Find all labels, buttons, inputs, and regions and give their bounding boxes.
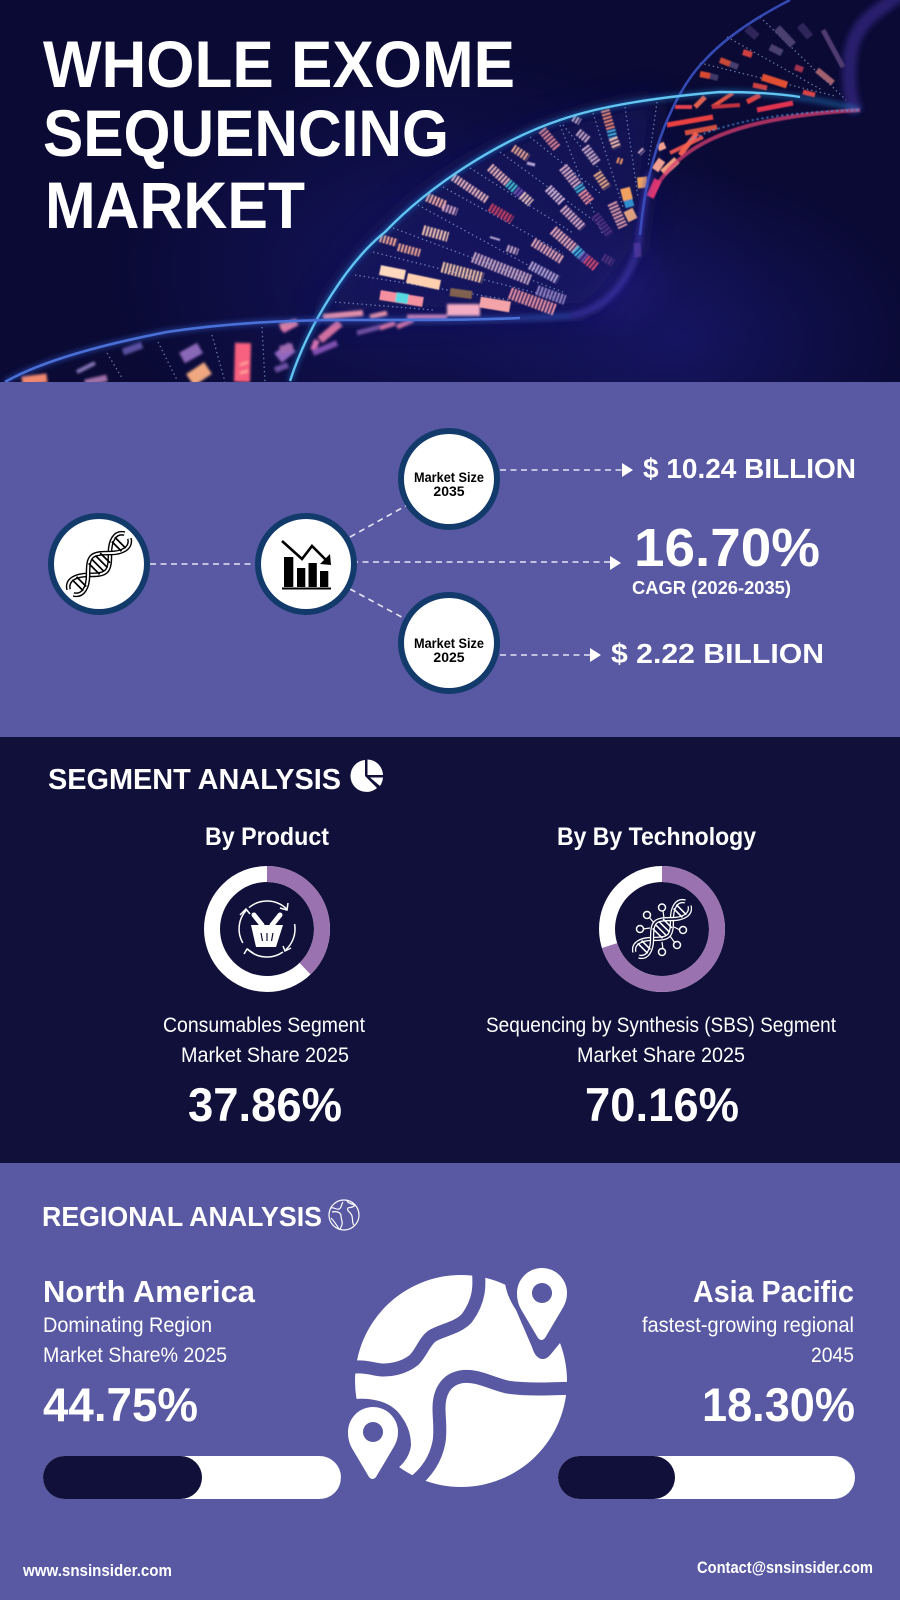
icon: DNA circle	[51, 516, 147, 612]
text: north america: North America	[43, 1274, 256, 1309]
callout: market size 2025: Market Size	[414, 635, 484, 651]
icon: basket	[239, 901, 295, 957]
title: WHOLE EXOME	[43, 27, 515, 101]
footer: website: www.snsinsider.com	[22, 1561, 172, 1580]
callout: market size 2025	[401, 595, 497, 691]
heading: segment analysis: SEGMENT ANALYSIS	[48, 764, 341, 796]
text: fastest-growing	[642, 1314, 854, 1367]
text: dominating region: Dominating Region	[43, 1314, 212, 1337]
title: MARKET	[45, 168, 305, 242]
value: consumables share: 37.86%	[188, 1079, 342, 1132]
bar: north america	[43, 1456, 341, 1499]
text: consumables segment: Consumables Segment	[163, 1014, 365, 1037]
callout: market size 2025: 2025	[433, 649, 465, 665]
strands	[5, 0, 860, 382]
icon: chart circle	[258, 516, 354, 612]
value: asia pacific share: 18.30%	[702, 1379, 855, 1432]
callout: market size 2035: 2035	[433, 483, 465, 499]
label: CAGR period: CAGR (2026-2035)	[632, 578, 791, 598]
text: asia pacific: Asia Pacific	[693, 1274, 854, 1309]
icon: pie chart	[350, 760, 383, 792]
text: SBS segment: Market Share 2025	[577, 1044, 745, 1067]
connector: chart to market size 2025	[350, 589, 409, 621]
text: SBS segment: Sequencing by Synthesis (SBS) Segment	[486, 1014, 836, 1037]
connector: chart to market size 2035	[350, 504, 409, 537]
panel: regional analysis	[0, 1163, 900, 1600]
chart: SBS donut	[607, 874, 717, 984]
bar: asia pacific	[558, 1456, 855, 1499]
text: consumables segment: Market Share 2025	[181, 1044, 349, 1067]
text: SBS segment	[486, 1014, 836, 1067]
value: north america share: 44.75%	[43, 1379, 198, 1432]
value: 2035 market size: $ 10.24 BILLION	[643, 453, 856, 484]
illustration: DNA helix	[5, 0, 900, 383]
chart: consumables donut	[212, 874, 322, 984]
icon: DNA nodes	[630, 897, 694, 961]
arrow: to 2035 value	[500, 463, 633, 477]
footer: contact: Contact@snsinsider.com	[697, 1558, 873, 1577]
callout: market size 2035: Market Size	[414, 469, 484, 485]
panel: header	[0, 0, 900, 382]
panel: market size	[0, 382, 900, 737]
connector: DNA to chart	[150, 563, 258, 565]
text: dominating region	[43, 1314, 227, 1367]
title: SEQUENCING	[43, 96, 449, 170]
bars: lower strand	[22, 310, 480, 383]
text: dominating region: Market Share% 2025	[43, 1344, 227, 1367]
panel: segment analysis	[0, 737, 900, 1163]
text: fastest-growing: 2045	[811, 1344, 854, 1367]
heading: by product: By Product	[205, 823, 330, 851]
arrow: to 2025 value	[500, 648, 601, 662]
value: SBS share: 70.16%	[585, 1079, 739, 1132]
arrow: to CAGR	[352, 556, 621, 570]
value: 2025 market size: $ 2.22 BILLION	[611, 638, 824, 669]
heading: by technology: By By Technology	[557, 823, 756, 851]
bars: red twist	[650, 25, 860, 197]
bars: upper fan	[380, 110, 643, 310]
title	[43, 41, 513, 228]
text: fastest-growing: fastest-growing regional	[642, 1314, 854, 1337]
text: consumables segment	[163, 1014, 365, 1067]
heading: regional analysis: REGIONAL ANALYSIS	[42, 1201, 322, 1232]
callout: market size 2035	[401, 431, 497, 527]
icon: globe	[329, 1200, 359, 1230]
value: CAGR: 16.70%	[634, 518, 820, 578]
icon: world map with pins	[340, 1262, 600, 1494]
